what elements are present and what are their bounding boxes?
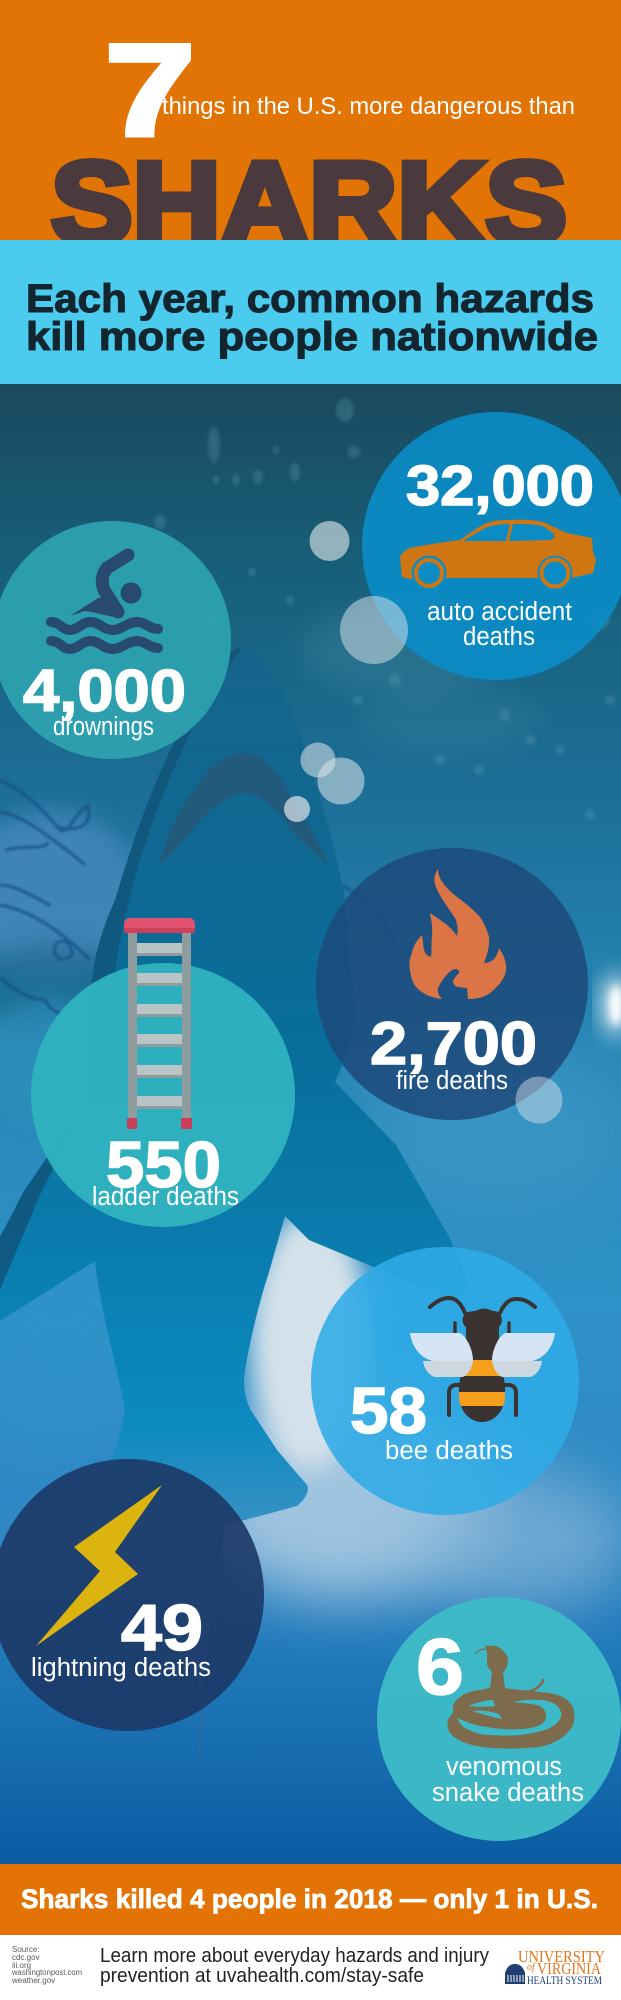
label: auto accident deaths: auto accident [427, 598, 572, 626]
bottom callout band [0, 1864, 621, 1935]
panel: ladder deaths [31, 918, 295, 1227]
icon: bee [410, 1298, 555, 1422]
icon: ladder [124, 918, 195, 1129]
number 6: 6 [416, 1622, 464, 1711]
label: lightning deaths: lightning deaths [31, 1654, 211, 1682]
label: drownings: drownings [53, 713, 154, 741]
icon: lightning bolt [36, 1485, 162, 1646]
logo: University of Virginia Health System: VIRGINIA [537, 1959, 602, 1978]
source list: weather.gov [11, 1976, 55, 1985]
callout text: Sharks killed 4 people in 2018 — only 1 in U.S. [21, 1884, 598, 1914]
panel: drownings [0, 521, 231, 759]
logo: University of Virginia Health System: of [527, 1962, 536, 1973]
subtitle line 1: Each year, common hazards [26, 277, 594, 321]
subtitle line 2: kill more people nationwide [26, 315, 598, 359]
call to action text [100, 1945, 489, 1987]
panel: venomous snake deaths [377, 1597, 621, 1841]
source list: iii.org [12, 1961, 31, 1970]
logo: University of Virginia Health System: UNIVERSITY [518, 1947, 605, 1966]
call to action text: Learn more about everyday hazards and injury [100, 1945, 489, 1967]
logo: University of Virginia Health System [505, 1947, 605, 1987]
number 49: 49 [121, 1591, 203, 1664]
number 4,000: 4,000 [23, 658, 186, 724]
label line 2: deaths [463, 623, 535, 651]
subtitle band [0, 240, 621, 384]
source list: cdc.gov [12, 1953, 40, 1962]
icon: flame [409, 869, 506, 999]
title SHARKS: SHARKS [51, 138, 567, 268]
shark mouth [158, 753, 329, 867]
label: snake deaths: snake deaths [432, 1779, 584, 1807]
panel: bee deaths [311, 1247, 579, 1515]
icon: swimmer [51, 555, 158, 649]
label: bee deaths: bee deaths [385, 1437, 513, 1465]
number 2,700: 2,700 [370, 1010, 537, 1077]
icon: snake [447, 1646, 574, 1748]
number 58: 58 [350, 1374, 427, 1447]
panel: fire deaths [316, 848, 588, 1120]
label: fire deaths: fire deaths [396, 1067, 508, 1095]
icon: car [400, 520, 596, 590]
bubbles [284, 521, 562, 1124]
panel: auto accident deaths [362, 412, 621, 680]
number 550: 550 [106, 1128, 221, 1201]
underwater background with shark [0, 384, 621, 1864]
source list: washingtonpost.com [11, 1968, 82, 1977]
shark silhouette [0, 647, 467, 1783]
source list [11, 1945, 82, 1985]
source list: Source: [12, 1945, 40, 1954]
label: venomous: venomous [446, 1753, 562, 1781]
label: ladder deaths: ladder deaths [92, 1183, 239, 1211]
number 32,000: 32,000 [406, 454, 594, 518]
footer [0, 1935, 621, 2000]
header band [0, 0, 621, 240]
panel: lightning deaths [0, 1459, 264, 1731]
large numeral 7: 7 [105, 17, 195, 163]
call to action text: prevention at uvahealth.com/stay-safe [100, 1965, 424, 1987]
subtitle text: things in the U.S. more dangerous than [162, 93, 575, 120]
